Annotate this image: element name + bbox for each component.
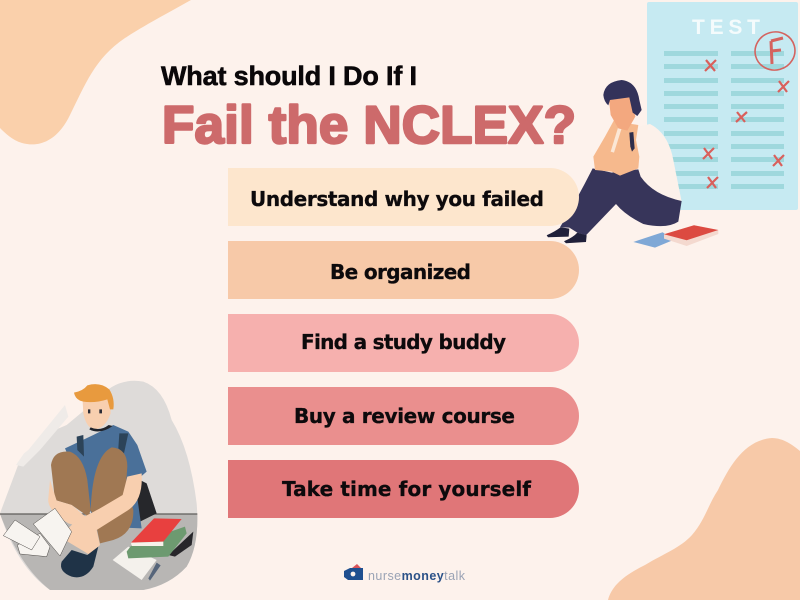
heading: first line: What should I Do If I (161, 61, 417, 91)
shoes (61, 547, 98, 577)
red book (664, 225, 718, 246)
grade F circled (751, 27, 799, 75)
list item 3 (228, 314, 579, 372)
list item 2: Be organized (330, 260, 471, 284)
illustration: sitting man with head in hands (547, 80, 718, 248)
list item 5: Take time for yourself (282, 477, 531, 501)
shirt (630, 124, 682, 202)
list item 1: Understand why you failed (250, 187, 544, 211)
test heading: TEST (692, 16, 760, 39)
list item 1 (228, 168, 579, 226)
list item 4: Buy a review course (294, 404, 515, 428)
list item 3: Find a study buddy (301, 330, 506, 354)
logo: nursemoneytalk (344, 564, 466, 583)
blue book (633, 232, 673, 248)
icon: wallet (344, 564, 363, 580)
crumpled papers (3, 508, 72, 557)
stack of books (168, 532, 193, 557)
hair (603, 80, 642, 116)
illustration: test paper (647, 2, 799, 210)
pale streak on backdrop (16, 405, 68, 467)
head (83, 398, 111, 429)
list item 2 (228, 241, 579, 299)
eyes (88, 409, 102, 413)
hair (74, 384, 114, 409)
tie (629, 132, 635, 152)
grey backdrop (0, 381, 197, 590)
heading: main title: Fail the NCLEX? (162, 96, 576, 155)
skin limbs (48, 480, 87, 527)
shoes (547, 227, 569, 237)
trousers (560, 168, 682, 235)
floor (0, 514, 197, 590)
face (609, 97, 635, 131)
logo: nursemoneytalk: nursemoneytalk (368, 569, 466, 583)
collar shadow (89, 425, 113, 432)
list item 4 (228, 387, 579, 445)
legs (51, 451, 91, 517)
blob: top left corner (0, 0, 191, 144)
straps (77, 433, 128, 457)
list item 5 (228, 460, 579, 518)
answer lines (664, 51, 784, 189)
blue shirt (65, 425, 147, 528)
blob: bottom right corner (608, 438, 800, 600)
illustration: sad boy sitting with books (0, 381, 197, 590)
arms (593, 118, 639, 176)
backpack (130, 477, 157, 527)
red cross marks (703, 60, 789, 188)
